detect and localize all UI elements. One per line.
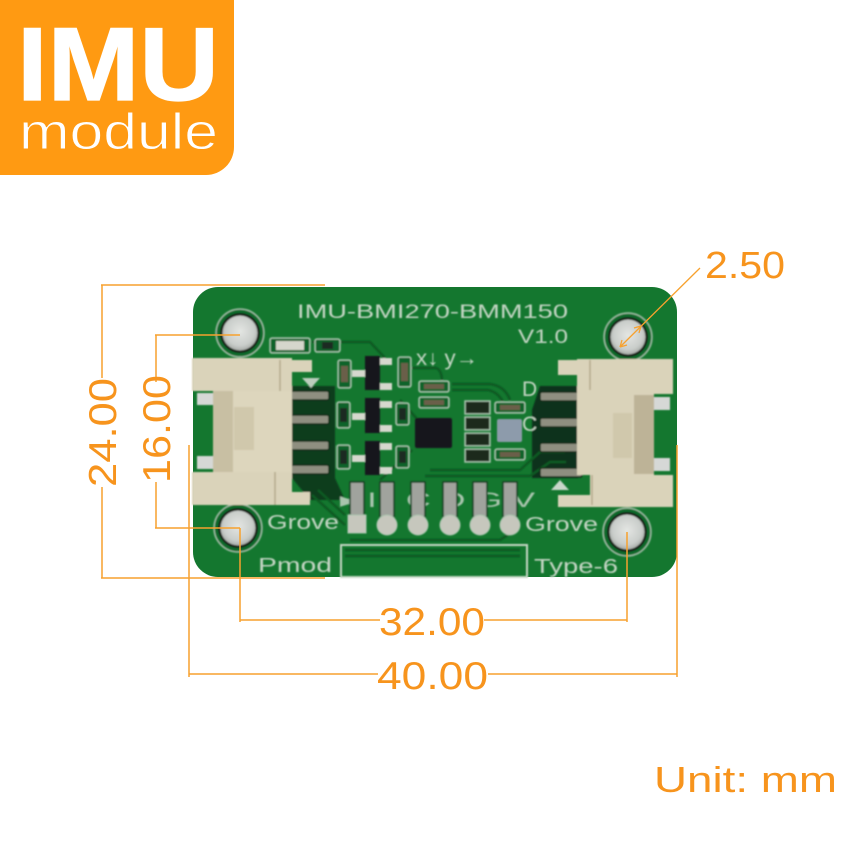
triangle markers (302, 378, 569, 490)
dimension: 40.00 width: 40.00 (377, 655, 488, 698)
dimension: 16.00 hole spacing: 16.00 (136, 375, 179, 483)
badge: IMU module (0, 0, 234, 175)
badge title: IMU: IMU (17, 7, 219, 123)
small resistors (270, 338, 525, 469)
silkscreen: board name: IMU-BMI270-BMM150 (297, 302, 568, 323)
silkscreen: D C labels: C (522, 413, 537, 436)
board traces (312, 342, 566, 556)
connector: left Grove (192, 358, 312, 505)
connector pins right (540, 392, 582, 477)
dimension: 2.50 hole diameter (620, 245, 785, 347)
IMU chip (415, 418, 452, 448)
magnetometer chip (497, 419, 522, 442)
silkscreen: pin labels: ▸ I I C D G V (340, 489, 535, 512)
dark areas around connector pins (292, 386, 578, 500)
transistors (352, 356, 392, 475)
dimension: 40.00 width (189, 445, 677, 698)
dimension: 2.50 hole diameter: 2.50 (705, 245, 785, 287)
capacitor array (465, 401, 490, 462)
mounting holes (214, 309, 652, 556)
dimension: 24.00 height: 24.00 (82, 378, 125, 487)
connector: right Grove (558, 359, 673, 507)
circuit board (192, 287, 677, 578)
silkscreen: Grove right: Grove (525, 514, 598, 536)
connector pins left (290, 391, 329, 474)
dimension: 32.00 hole spacing (240, 528, 627, 644)
silkscreen: Pmod: Pmod (258, 555, 332, 577)
dimension: 16.00 hole spacing (136, 335, 240, 528)
silkscreen: version: V1.0 (518, 327, 568, 348)
badge subtitle: module: module (19, 103, 218, 160)
solder pads (348, 482, 520, 535)
silkscreen: D C labels (522, 378, 537, 436)
unit note: Unit: mm (654, 759, 837, 800)
silkscreen: Type-6: Type-6 (534, 556, 618, 578)
resistor centres (276, 341, 520, 464)
silkscreen: connector outline (341, 545, 527, 577)
dimension: 32.00 hole spacing: 32.00 (379, 601, 485, 644)
dimension: 24.00 height (82, 285, 325, 578)
silkscreen: D C labels: D (522, 378, 537, 401)
silkscreen: axis labels: x↓ y→ (416, 347, 478, 370)
silkscreen: Grove left: Grove (267, 512, 339, 534)
